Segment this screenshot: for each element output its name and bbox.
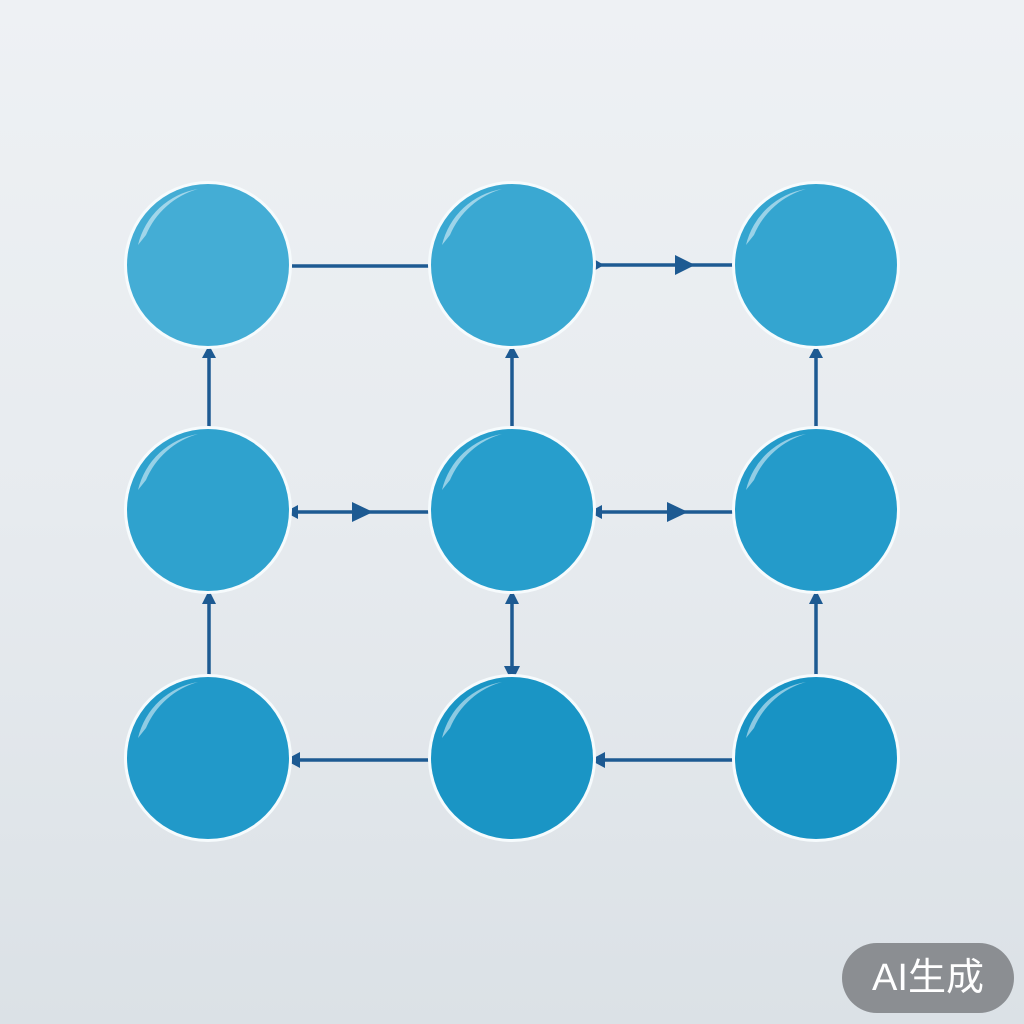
- arrow: row3 left: [285, 752, 430, 768]
- badge: AI生成: [842, 943, 1014, 1013]
- badge: AI生成: AI生成: [872, 957, 984, 999]
- arrow: col1 lower: [202, 590, 216, 680]
- arrow: col2 upper: [505, 345, 519, 430]
- arrow: col2 lower: [504, 590, 520, 682]
- arrow: row2 right: [589, 502, 735, 522]
- nodes: [124, 181, 900, 842]
- arrow: row2 left: [285, 502, 430, 522]
- arrow: col3 lower: [809, 590, 823, 680]
- arrow: row1 right: [592, 255, 735, 275]
- arrow: col1 upper: [202, 345, 216, 430]
- arrow: col3 upper: [809, 345, 823, 430]
- arrow: row3 right: [590, 752, 735, 768]
- arrow: row1 left: [292, 264, 430, 268]
